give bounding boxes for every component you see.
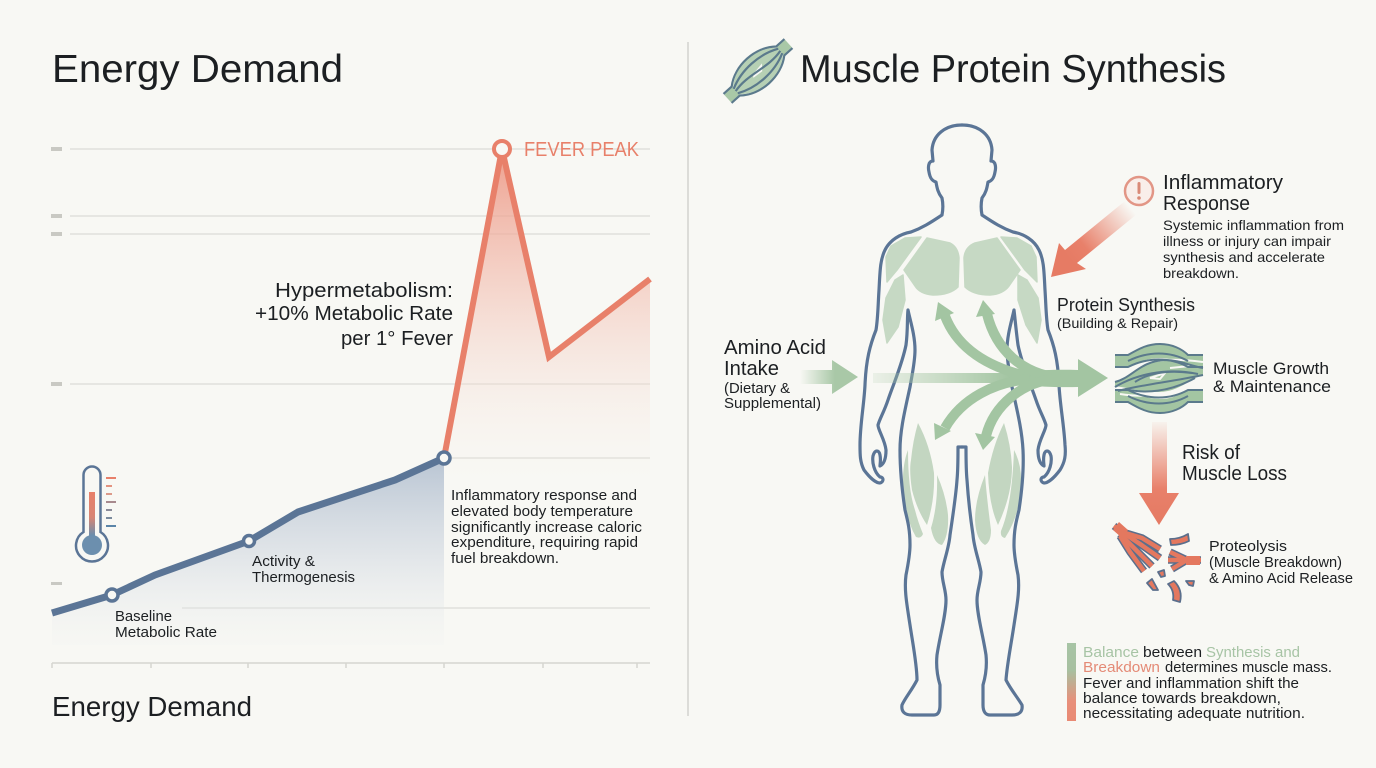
arrows: internal protein synthesis flow [873,300,1108,450]
arrow: amino acid intake [800,360,858,394]
label: proteolysis: & Amino Acid Release [1209,571,1353,587]
callout: balance note: Synthesis and [1206,645,1300,661]
text: inflammatory response note: fuel breakdown. [451,551,559,567]
label: activity and thermogenesis [252,554,355,586]
label: baseline metabolic rate [115,609,217,641]
heading: energy demand: Energy Demand [52,48,343,91]
label: proteolysis: Proteolysis [1209,539,1287,555]
text: inflammatory response: Response [1163,193,1250,215]
callout: balance note: Fever and inflammation shift the [1083,676,1299,692]
callout: hypermetabolism: per 1° Fever [341,328,453,350]
chart: energy demand curve [52,141,650,668]
callout: hypermetabolism: Hypermetabolism: [275,280,453,302]
label: proteolysis [1209,539,1353,587]
text: inflammatory response: Systemic inflammation from [1163,217,1344,233]
text: inflammatory response: Inflammatory [1163,172,1283,194]
text: inflammatory response: illness or injury can impair [1163,233,1331,249]
muscles: thighs [903,423,1021,545]
panel: muscle protein synthesis [716,31,1353,722]
arrow: risk of muscle loss [1139,422,1179,525]
label: amino acid intake: (Dietary & [724,381,790,397]
arrow: inflammatory response [1051,201,1137,277]
callout: balance note [1067,643,1332,722]
label: fever peak: FEVER PEAK [524,139,640,161]
text: inflammatory response note: significantly increase caloric [451,520,642,536]
figure: human body [860,125,1065,715]
label: risk of muscle loss: Risk of [1182,442,1240,464]
callout: balance note: Balance [1083,645,1139,661]
label: baseline metabolic rate: Metabolic Rate [115,625,217,641]
label: amino acid intake: Supplemental) [724,396,821,412]
muscles: shoulders and chest [883,237,1041,343]
label: activity and thermogenesis: Thermogenesis [252,570,355,586]
label: protein synthesis [1057,295,1195,331]
icon: alert [1125,177,1153,205]
callout: hypermetabolism [255,280,453,350]
text: inflammatory response note: elevated body temperature [451,504,633,520]
label: amino acid intake [724,337,826,412]
panel: energy demand [51,48,650,722]
heading: muscle protein synthesis: Muscle Protein Synthesis [800,48,1226,91]
icon: thermometer [76,466,116,562]
icon: muscle bundle [716,31,800,111]
callout: balance note: Breakdown [1083,660,1160,676]
label: proteolysis: (Muscle Breakdown) [1209,555,1342,571]
label: protein synthesis: (Building & Repair) [1057,315,1178,331]
label: protein synthesis: Protein Synthesis [1057,295,1195,315]
callout: balance note: necessitating adequate nutrition. [1083,706,1305,722]
icon: healthy muscle [1115,344,1203,413]
body outline [860,125,1065,715]
label: muscle growth and maintenance [1213,359,1331,396]
callout: hypermetabolism: +10% Metabolic Rate [255,303,453,325]
text: inflammatory response note: Inflammatory response and [451,488,637,504]
label: activity and thermogenesis: Activity & [252,554,315,570]
label: amino acid intake: Amino Acid [724,337,826,359]
text: inflammatory response [1163,172,1344,281]
icon: muscle breakdown [1113,522,1201,602]
label: risk of muscle loss [1182,442,1287,485]
label: muscle growth and maintenance: & Maintenance [1213,377,1331,396]
text: inflammatory response note: expenditure, requiring rapid [451,535,638,551]
text: inflammatory response note [451,488,642,567]
text: inflammatory response: synthesis and accelerate [1163,249,1325,265]
label: risk of muscle loss: Muscle Loss [1182,463,1287,485]
label: amino acid intake: Intake [724,358,779,380]
heading: bottom energy demand: Energy Demand [52,691,252,722]
callout: balance note: between [1143,645,1202,661]
callout: balance note: determines muscle mass. [1165,660,1332,676]
label: muscle growth and maintenance: Muscle Growth [1213,359,1329,378]
callout: balance note: balance towards breakdown, [1083,691,1281,707]
label: baseline metabolic rate: Baseline [115,609,172,625]
text: inflammatory response: breakdown. [1163,265,1239,281]
